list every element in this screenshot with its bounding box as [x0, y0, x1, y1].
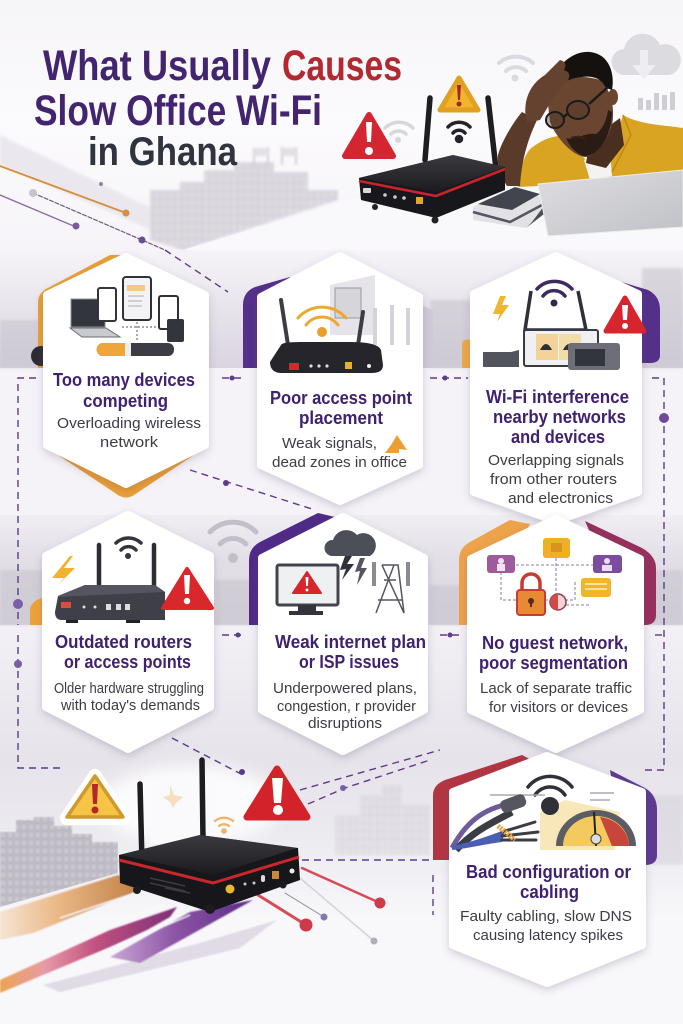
- card shape: [46, 515, 210, 749]
- heading line two: or ISP issues: [299, 652, 399, 672]
- panel accent: [243, 277, 290, 368]
- title: Slow Office Wi-Fi: [34, 87, 322, 135]
- panel accent left: [462, 340, 470, 368]
- description: and electronics: [508, 491, 613, 507]
- router antennas: [140, 760, 203, 862]
- background cityscape: mid and lower: [0, 268, 683, 865]
- desk surface: [183, 198, 683, 250]
- icon: yellow warning triangle: [440, 78, 478, 110]
- router: [119, 835, 300, 914]
- man: [498, 52, 683, 187]
- router antennas: [425, 98, 497, 178]
- description: with today's demands: [60, 698, 200, 714]
- heading: Too many devices: [53, 370, 195, 390]
- lower-left city: [0, 817, 118, 912]
- description: Faulty cabling, slow DNS: [460, 909, 632, 925]
- heading: No guest network,: [482, 633, 628, 653]
- description: [57, 416, 201, 451]
- icon: devices: [70, 277, 184, 356]
- panel: poor access point placement: [243, 256, 433, 501]
- panel accent left: [433, 755, 535, 860]
- description: Overlapping signals: [488, 453, 624, 469]
- icon: red warning triangle: [345, 115, 393, 156]
- card shape: [262, 517, 424, 751]
- panel accent: [30, 598, 42, 625]
- icon: red warning: [247, 769, 307, 817]
- hero router lower with warnings and streaks: [0, 760, 386, 993]
- icon: router with wifi: [270, 275, 408, 373]
- description: from other routers: [490, 472, 617, 488]
- icon: monitor, storm cloud and tower: [277, 530, 408, 615]
- icon: router, devices and interference: [483, 281, 644, 370]
- icon: yellow warning: [67, 776, 123, 818]
- connector lines with dots: [258, 868, 386, 944]
- faint star and backdrop: [150, 775, 215, 845]
- panel accent left: [459, 520, 530, 625]
- panel: bad configuration or cabling: [433, 755, 657, 983]
- description: [488, 453, 624, 507]
- heading: Poor access point: [270, 388, 412, 408]
- card shape: [453, 756, 642, 983]
- description: Weak signals,: [282, 436, 377, 452]
- heading: Wi-Fi interference: [486, 387, 629, 407]
- title: [34, 42, 402, 174]
- panel accent top: [38, 255, 125, 368]
- background cityscape: top: [0, 135, 338, 250]
- description: [272, 436, 407, 471]
- title: What Usually: [43, 42, 271, 90]
- title: in Ghana: [88, 130, 238, 174]
- description: [273, 681, 417, 732]
- heading line two: poor segmentation: [479, 653, 628, 673]
- heading line two: or access points: [64, 652, 191, 672]
- description: congestion, r provider: [277, 699, 416, 715]
- panel: weak internet plan: [249, 513, 426, 751]
- panel accent: [249, 513, 335, 625]
- description: dead zones in office: [272, 455, 407, 471]
- description: [480, 681, 632, 716]
- dark connector node: [31, 346, 51, 366]
- panel accent bottom: [43, 445, 209, 498]
- description: Lack of separate traffic: [480, 681, 632, 697]
- icon: orange arrow mark: [385, 435, 407, 453]
- heading line two: placement: [299, 408, 383, 428]
- heading: Weak internet plan: [275, 632, 426, 652]
- panel: Wi-Fi interference: [462, 256, 660, 521]
- icon: yellow warning mark: [456, 85, 462, 106]
- icon: black wifi: [448, 122, 470, 142]
- card shape: [47, 257, 205, 484]
- description: [460, 909, 632, 944]
- heading line two: competing: [83, 391, 168, 411]
- icon: orange wifi: [215, 818, 233, 833]
- panel: outdated routers: [30, 515, 212, 749]
- heading line two: nearby networks: [493, 407, 626, 427]
- title: Causes: [282, 42, 402, 90]
- faint wifi icon background: [210, 522, 256, 563]
- signal streaks: [0, 875, 277, 993]
- hero illustration: frustrated man, router and laptop: [183, 34, 683, 250]
- icon: faint wifi and cloud: [385, 34, 681, 143]
- laptop: [538, 170, 683, 236]
- heading line two: cabling: [520, 882, 579, 902]
- heading: Outdated routers: [55, 632, 192, 652]
- description: [54, 681, 204, 714]
- icon: network security diagram: [487, 538, 622, 615]
- router: [359, 155, 505, 224]
- panel accent right: [605, 277, 660, 363]
- card shape: [474, 256, 638, 521]
- description: for visitors or devices: [489, 700, 628, 716]
- description: causing latency spikes: [473, 928, 623, 944]
- description: Underpowered plans,: [273, 681, 417, 697]
- decoration: lines top left: [0, 166, 165, 250]
- icon: old router with warning: [52, 538, 212, 623]
- heading line three: and devices: [511, 427, 605, 447]
- connector: dashed network lines: [13, 250, 669, 915]
- books: [473, 187, 544, 228]
- icon: warning mark: [365, 122, 373, 155]
- panel accent right: [610, 770, 657, 865]
- card shape: [261, 256, 419, 501]
- description: disruptions: [308, 716, 382, 732]
- panel accent right: [585, 521, 656, 625]
- panel: too many devices: [31, 255, 209, 498]
- icon: cables, wifi and speed gauge: [452, 776, 636, 850]
- description: network: [100, 435, 159, 451]
- card shape: [471, 519, 640, 749]
- panel: no guest network: [459, 519, 656, 749]
- description: Overloading wireless: [57, 416, 201, 432]
- panel accent right: [410, 300, 433, 368]
- heading: Bad configuration or: [466, 862, 631, 882]
- description: Older hardware struggling: [54, 681, 204, 697]
